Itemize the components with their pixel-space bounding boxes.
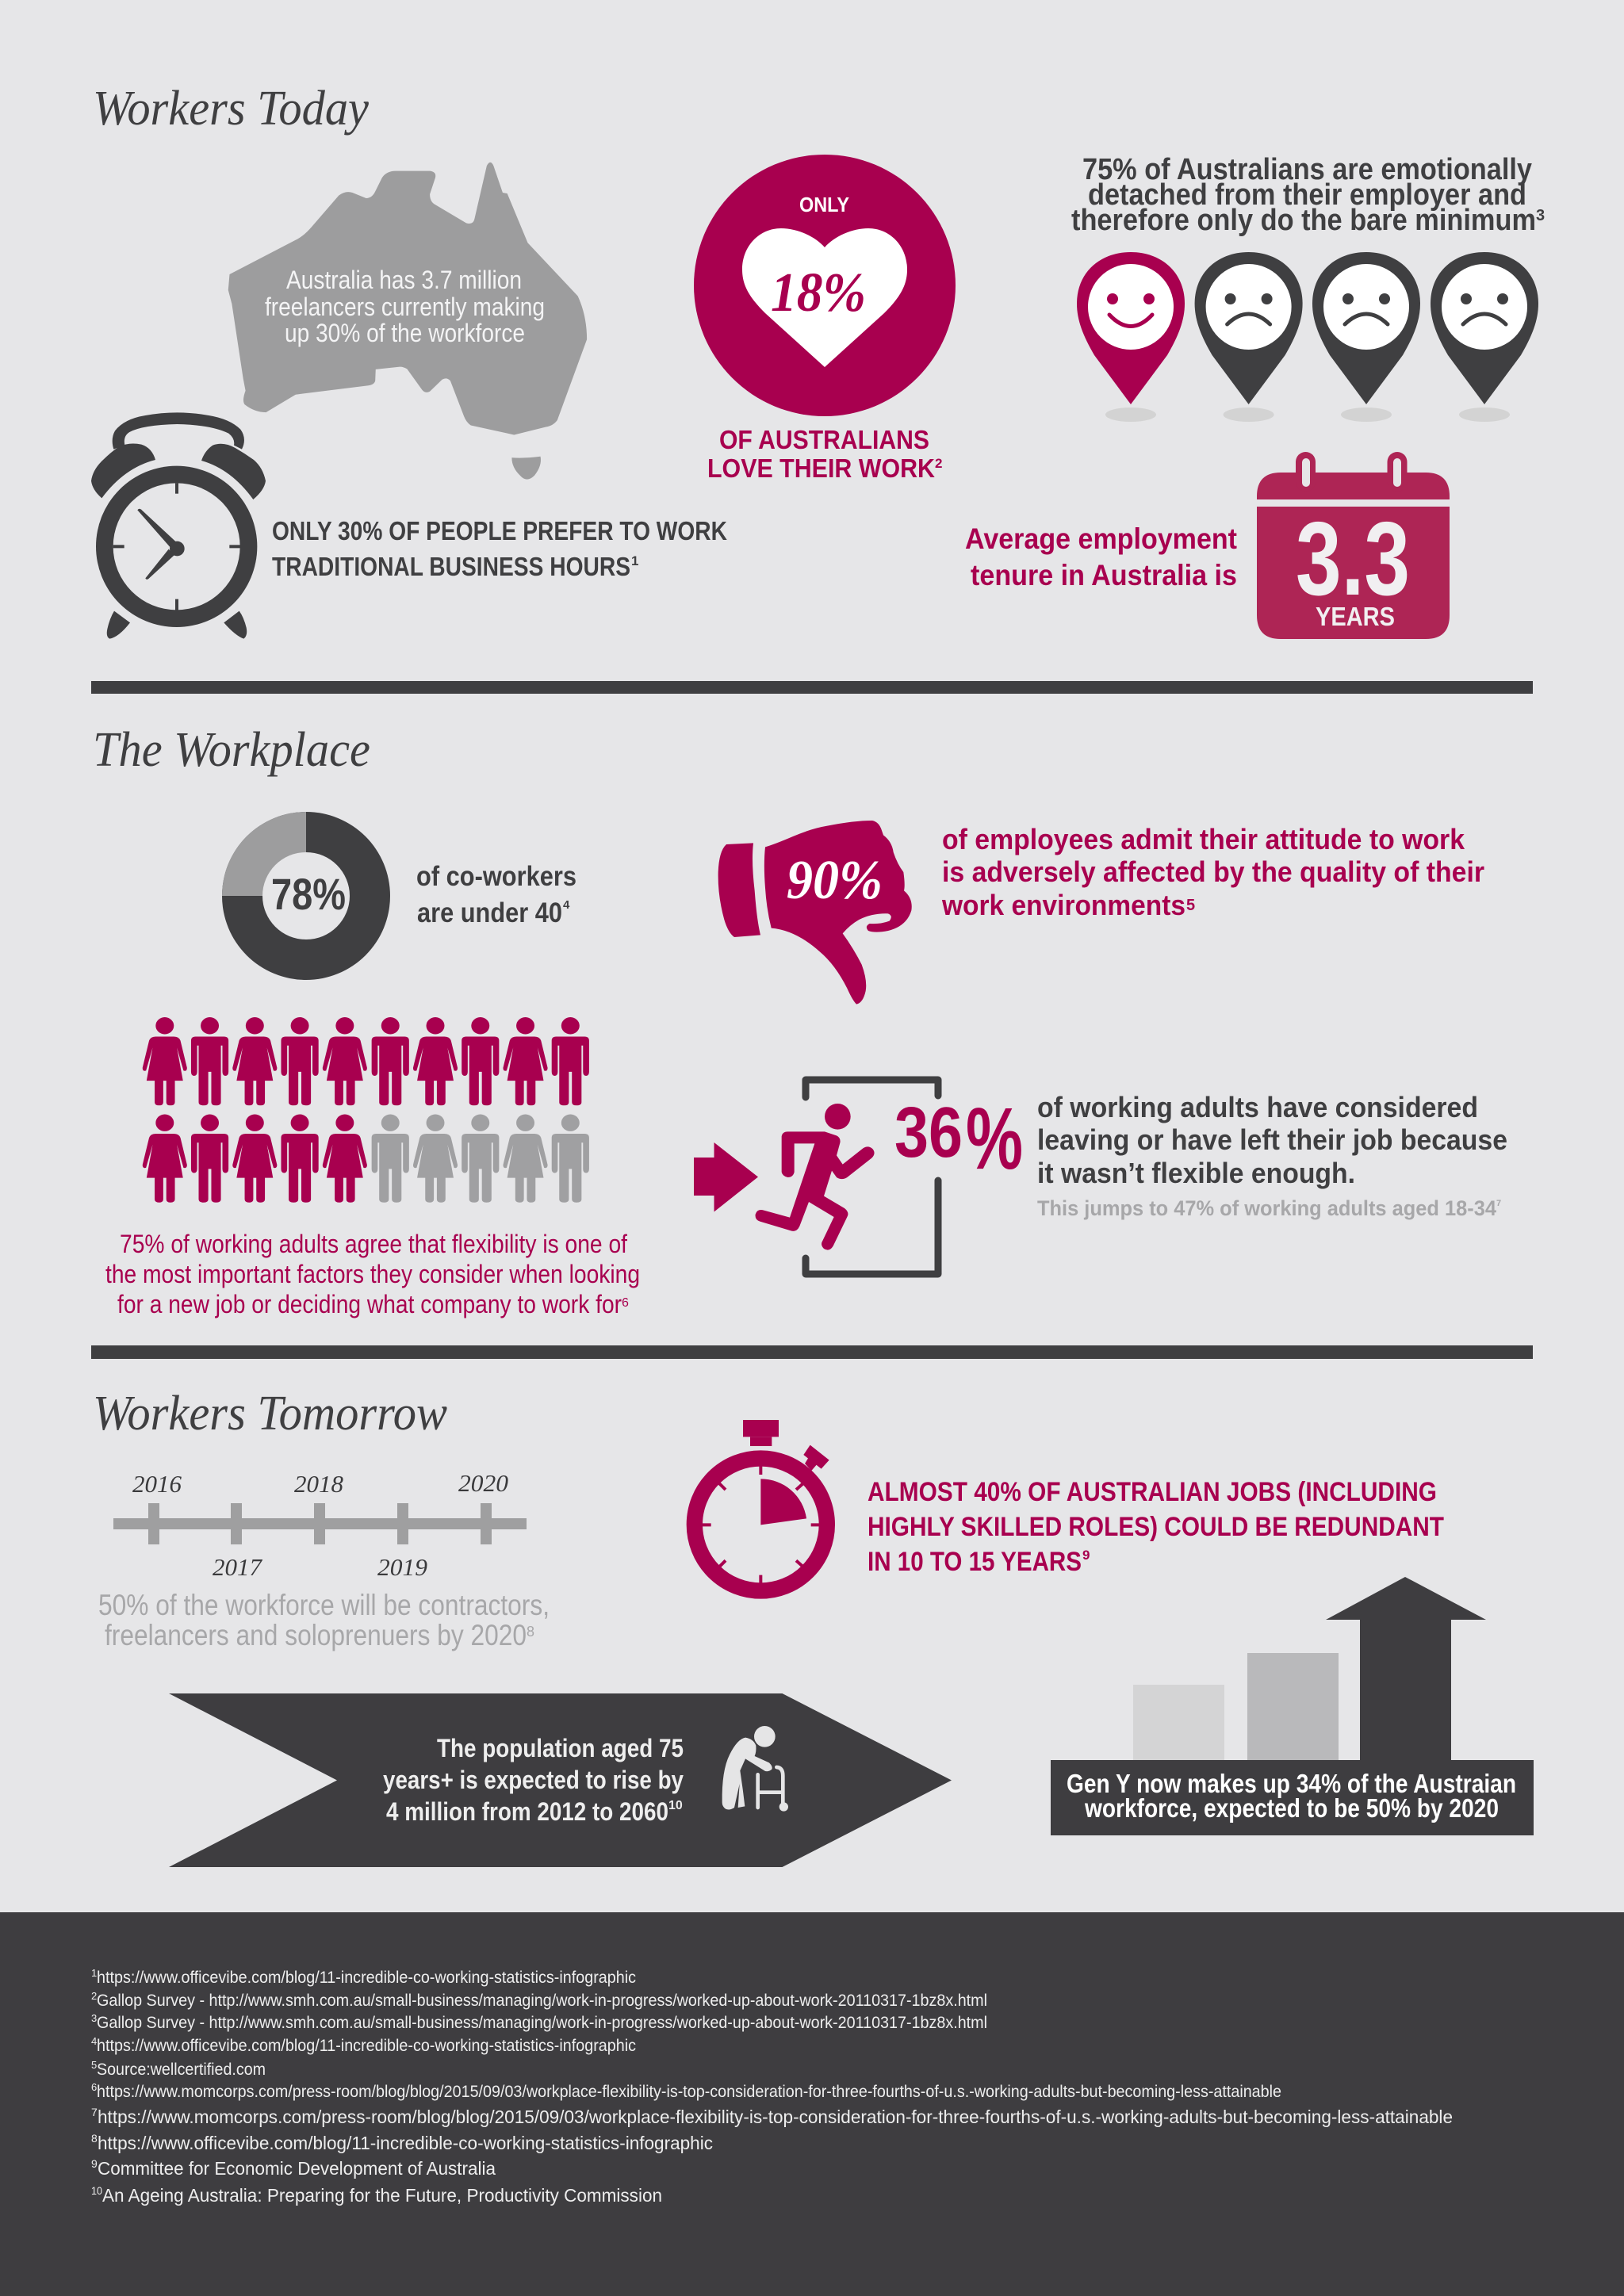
footer: sources: 2 [91, 1990, 97, 2002]
panel: redundant jobs stopwatch [695, 1420, 1444, 1590]
icon: running figure [756, 1104, 875, 1250]
icon: circle with heart [694, 155, 956, 416]
text: redundant jobs statement [868, 1477, 1444, 1577]
footer: sources: https://www.momcorps.com/press-room/blog/blog/2015/09/03/workplace-flexibility-is-top-consideration-for-three-fourths-of-u.s.-working-adults-but-becoming-less-attainable [97, 2083, 1281, 2101]
chart: donut 78 percent [222, 812, 390, 980]
text: employees attitude statement: is adversely affected by the quality of their [942, 855, 1484, 888]
text: employees attitude statement: of employees admit their attitude to work [942, 823, 1465, 855]
text: emotionally detached statement: 75% of Australians are emotionally [1082, 153, 1532, 186]
footer: sources [0, 1912, 1624, 2296]
text: population statement: 4 million from 2012 to 2060 [386, 1797, 668, 1826]
panel: love their work [694, 155, 956, 483]
panel: Australia freelancers map [228, 163, 587, 480]
text: contractors statement: 8 [527, 1624, 534, 1640]
text: of Australians love their work: OF AUSTRALIANS [719, 425, 929, 454]
footer: sources: Source:wellcertified.com [97, 2061, 266, 2079]
panel: co-workers donut [222, 812, 576, 980]
footer: sources: https://www.momcorps.com/press-room/blog/blog/2015/09/03/workplace-flexibility-is-top-consideration-for-three-fourths-of-u.s.-working-adults-but-becoming-less-attainable [98, 2107, 1453, 2127]
panel: flexibility people pictogram [105, 1017, 640, 1318]
icon: calendar [1257, 452, 1450, 639]
footer: sources: 6 [91, 2081, 97, 2093]
footer: sources: Committee for Economic Development of Australia [98, 2158, 496, 2179]
text: of co-workers are under 40: of co-workers [416, 861, 576, 892]
text: emotionally detached statement [1071, 153, 1545, 237]
footer: sources: Gallop Survey - http://www.smh.com.au/small-business/managing/work-in-progress/worked-up-about-work-20110317-1bz8x.html [97, 1992, 987, 2010]
footer: sources: An Ageing Australia: Preparing for the Future, Productivity Commission [102, 2185, 662, 2206]
text box: Gen Y statement [1051, 1760, 1534, 1835]
text: traditional business hours: ONLY 30% OF PEOPLE PREFER TO WORK [272, 516, 727, 545]
panel: ageing population arrow [169, 1693, 952, 1867]
text: contractors statement: freelancers and soloprenuers by 2020 [105, 1619, 527, 1651]
heading: Workers Tomorrow: Workers Tomorrow [93, 1387, 447, 1441]
chart: timeline 2016-2020 [113, 1469, 527, 1581]
footer: sources: 5 [91, 2059, 97, 2071]
footer: sources: 10 [91, 2184, 102, 2197]
panel: leaving job runner [694, 1080, 1507, 1274]
chart: timeline 2016-2020: 2017 [213, 1553, 263, 1581]
text: contractors statement: 50% of the workforce will be contractors, [98, 1589, 550, 1621]
text: of Australians love their work: LOVE THEIR WORK [707, 453, 935, 483]
text box: Gen Y statement: workforce, expected to be 50% by 2020 [1084, 1793, 1499, 1823]
text: emotionally detached statement: 3 [1536, 207, 1545, 224]
text box: Gen Y statement: Gen Y now makes up 34% of the Austraian [1067, 1769, 1516, 1798]
text: flexibility statement [105, 1230, 640, 1318]
text: flexibility statement: for a new job or deciding what company to work for [117, 1290, 622, 1318]
icon: arrow right [694, 1142, 758, 1211]
icon: map pin sad 1 [1195, 252, 1303, 422]
text: employees attitude statement: work environments [941, 889, 1185, 921]
panel: alarm clock statistic [91, 412, 727, 639]
text: of Australians love their work [707, 425, 942, 483]
text: 36 percent: % [966, 1090, 1023, 1188]
icon: Australia map [228, 163, 587, 480]
footer: sources: https://www.officevibe.com/blog/11-incredible-co-working-statistics-infographic [97, 2037, 636, 2055]
text: 78 percent: 78% [271, 869, 346, 919]
text: 47 percent note: 7 [1496, 1199, 1501, 1208]
text: freelancers statistic: Australia has 3.7 million [286, 266, 522, 294]
text: emotionally detached statement: detached from their employer and [1088, 178, 1526, 212]
icon: stopwatch [695, 1420, 829, 1590]
text: redundant jobs statement: 9 [1082, 1548, 1090, 1563]
text: 36 percent [894, 1090, 1023, 1188]
panel: Gen Y growth [1051, 1577, 1534, 1835]
text: freelancers statistic: freelancers currently making [265, 293, 545, 321]
heading: The Workplace: The Workplace [93, 723, 370, 777]
chart: timeline 2016-2020: 2020 [458, 1469, 509, 1497]
footer: sources: 1 [91, 1967, 97, 1979]
panel: emotionally detached [1071, 153, 1545, 422]
text: average employment tenure: Average employment [965, 522, 1237, 555]
panel: employment tenure [965, 452, 1450, 639]
text: considered leaving statement: it wasn’t flexible enough. [1037, 1157, 1355, 1189]
text: considered leaving statement: leaving or have left their job because [1037, 1123, 1507, 1156]
text: 18 percent: 18% [771, 262, 866, 323]
icon: elderly person with walker [722, 1726, 788, 1812]
text: 36 percent: 36 [894, 1093, 963, 1173]
text: average employment tenure [965, 522, 1237, 591]
text: emotionally detached statement: therefore only do the bare minimum [1071, 204, 1536, 237]
footer: sources: https://www.officevibe.com/blog/11-incredible-co-working-statistics-infographic [98, 2133, 713, 2153]
arrow banner [169, 1693, 952, 1867]
text: traditional business hours [272, 516, 727, 581]
chart: rising bars and arrow [1133, 1577, 1486, 1760]
text: redundant jobs statement: HIGHLY SKILLED ROLES) COULD BE REDUNDANT [868, 1512, 1444, 1542]
icon: door frame [806, 1080, 938, 1274]
text: 47 percent note: This jumps to 47% of working adults aged 18-34 [1037, 1196, 1496, 1220]
text: flexibility statement: 6 [622, 1296, 629, 1310]
icon: map pin sad 2 [1312, 252, 1420, 422]
footer: sources: 8 [91, 2132, 98, 2145]
footer: sources: 4 [91, 2035, 97, 2047]
text: flexibility statement: 75% of working adults agree that flexibility is one of [120, 1230, 627, 1258]
text: of Australians love their work: 2 [935, 456, 942, 471]
footer: sources: Gallop Survey - http://www.smh.com.au/small-business/managing/work-in-progress/worked-up-about-work-20110317-1bz8x.html [97, 2014, 987, 2032]
heading: Workers Today: Workers Today [93, 82, 369, 136]
text: considered leaving statement: of working adults have considered [1037, 1091, 1478, 1123]
text: employees attitude statement [941, 823, 1484, 921]
text: 90 percent: 90% [787, 850, 883, 911]
text: population statement: 10 [668, 1799, 683, 1812]
text: only: ONLY [799, 193, 849, 216]
text: redundant jobs statement: ALMOST 40% OF AUSTRALIAN JOBS (INCLUDING [868, 1477, 1437, 1507]
chart: timeline 2016-2020: 2016 [132, 1470, 182, 1498]
icon: thumbs down [718, 821, 912, 1004]
panel: timeline [98, 1469, 550, 1651]
text: 3.3: 3.3 [1296, 500, 1410, 617]
icon: alarm clock [91, 412, 266, 639]
text: of co-workers are under 40: 4 [563, 898, 570, 912]
chart: people pictogram [143, 1017, 589, 1203]
text: traditional business hours: TRADITIONAL BUSINESS HOURS [272, 552, 630, 581]
footer: sources: https://www.officevibe.com/blog/11-incredible-co-working-statistics-infographic [97, 1969, 636, 1987]
text: freelancers statistic: up 30% of the workforce [285, 319, 525, 347]
text: contractors statement [98, 1589, 550, 1651]
text: redundant jobs statement: IN 10 TO 15 YEARS [868, 1547, 1082, 1577]
footer: sources: 9 [91, 2157, 98, 2170]
text: traditional business hours: 1 [631, 553, 638, 568]
chart: timeline 2016-2020: 2019 [377, 1553, 427, 1581]
text: population statement: The population aged 75 [437, 1734, 684, 1762]
text: of co-workers are under 40 [416, 861, 576, 928]
icon: map pin smiling [1077, 252, 1185, 422]
text: population statement: years+ is expected to rise by [383, 1766, 684, 1794]
text: average employment tenure: tenure in Australia is [971, 559, 1237, 591]
text: years: YEARS [1316, 602, 1395, 631]
text: of co-workers are under 40: are under 40 [417, 897, 562, 928]
chart: timeline 2016-2020: 2018 [294, 1470, 344, 1498]
text: employees attitude statement: 5 [1186, 897, 1195, 914]
footer: sources: 7 [91, 2106, 98, 2118]
icon: map pin sad 3 [1431, 252, 1538, 422]
text: population statement [383, 1734, 684, 1826]
footer: sources: 3 [91, 2012, 97, 2024]
text: considered leaving statement [1037, 1091, 1507, 1189]
text: flexibility statement: the most important factors they consider when looking [105, 1260, 640, 1288]
panel: work environment thumb down [718, 821, 1484, 1004]
text: freelancers statistic [265, 266, 545, 347]
